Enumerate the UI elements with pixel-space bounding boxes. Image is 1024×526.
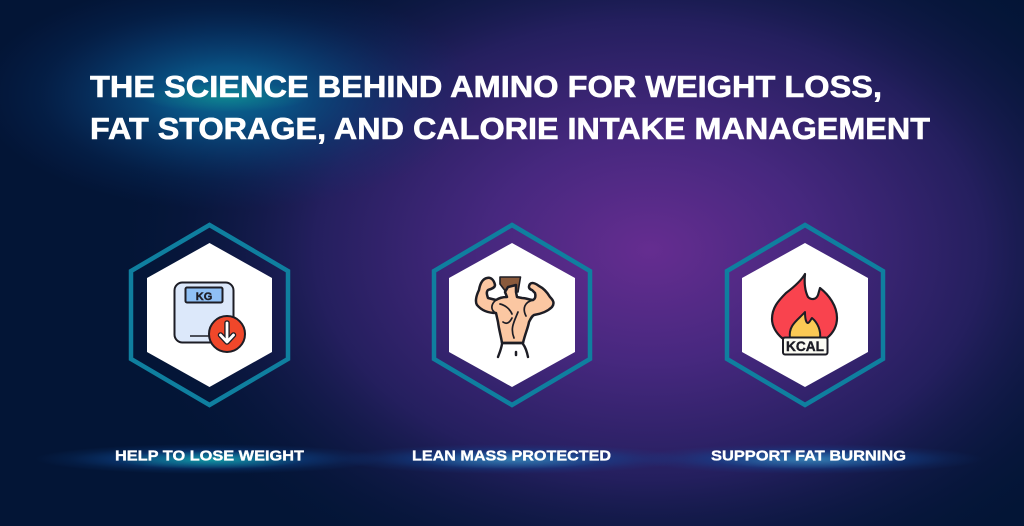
- hexagon frame with white hexagon: [434, 225, 590, 405]
- icon: weighing scale with down arrow: KG: [196, 291, 212, 303]
- title: [90, 70, 930, 146]
- icon: muscular man: [476, 277, 553, 357]
- icon: flame with kcal tag: KCAL: [786, 339, 824, 354]
- panel: support fat burning: [711, 225, 906, 464]
- icon: weighing scale with down arrow: [174, 282, 245, 352]
- icon: flame with kcal tag: [772, 274, 837, 354]
- panel: help to lose weight: [115, 225, 304, 464]
- hexagon frame with white hexagon: [131, 225, 288, 405]
- hexagon frame with white hexagon: [727, 225, 883, 405]
- title: THE SCIENCE BEHIND AMINO FOR WEIGHT LOSS,: [90, 70, 882, 104]
- label: LEAN MASS PROTECTED: [412, 448, 611, 464]
- label: SUPPORT FAT BURNING: [711, 448, 906, 464]
- panel: lean mass protected: [412, 225, 611, 464]
- title: FAT STORAGE, AND CALORIE INTAKE MANAGEMENT: [90, 112, 930, 146]
- label: HELP TO LOSE WEIGHT: [115, 448, 304, 464]
